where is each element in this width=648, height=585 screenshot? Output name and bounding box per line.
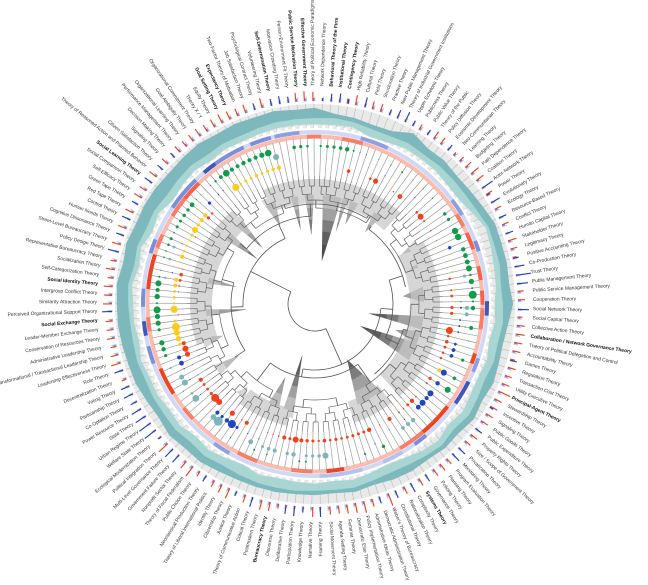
theory labels: left half: Theory of Reasoned Action and Planned Behavior [59,96,148,169]
theory labels: left half: Psychological Contract Theory [228,31,254,97]
theory labels: left half: Cognitive Dissonance Theory [49,206,111,233]
theory labels: right half: Co-Production Theory [529,252,577,266]
theory labels: left half: Representative Bureaucracy Theory [25,237,103,260]
theory labels: right half: Economic Development Theory [455,84,504,140]
theory labels: left half: Public Choice Theory [162,481,193,523]
theory labels: right half: Privatization Theory [467,456,503,491]
theory labels: right half: Governance Theory [431,485,460,525]
theory labels: left half: State Theory [108,421,135,442]
inner tree stems [222,204,407,382]
theory labels: right half: Theory of the Public [440,90,471,129]
theory labels: right half: Neo-Communitarian Theory [462,98,508,147]
theory labels: left half: Red Tape Theory [86,186,123,208]
theory labels: right half: Social Capital Theory [532,315,580,324]
theory labels: right half: Budgeting Theory [475,129,508,160]
theory labels: right half: Upper Echelons Theory [416,66,447,114]
theory labels: left half: Theory of Fiscal Federalism [144,476,185,527]
theory labels: right half: Contingency Theory [347,41,361,89]
theory labels: left half: Goal Setting Theory [193,67,220,111]
theory labels: left half: Socialization Theory [57,255,101,269]
theory labels: left half: Self-Determination Theory [253,31,272,92]
teal dots [164,153,469,459]
theory labels: right half: Signaling Theory [497,419,531,445]
green dots [153,145,477,463]
theory labels: right half: Public Value Theory [432,84,462,124]
theory labels: right half: Policy Diffusion Theory [447,91,483,135]
theory labels: right half: Stewardship Theory [506,403,548,429]
theory labels: left half: Decision Making Theory [126,107,167,149]
theory labels: left half: Voting Theory [87,389,117,407]
theory labels: right half: High Reliability Theory [356,41,372,91]
theory labels: right half: Public Goods Theory [491,427,533,459]
theory labels: left half: Policy Design Theory [59,233,106,251]
theory labels: left half: Social Identity Theory [47,277,98,287]
theory labels: left half: Job Satisfaction Theory [222,49,245,100]
theory labels: left half: Organizational Learning Theory [133,79,181,137]
theory labels: right half: Human Capital Theory [518,208,567,231]
theory labels: left half: Neoclassical Production Theory [159,486,201,548]
theory labels: left half: Power Resource Theory [82,413,130,446]
theory labels: left half: Theory of Liberal International Politics [163,491,209,565]
theory labels: right half: Structuration Theory [383,54,403,99]
theory labels: right half: Conflict Theory [515,204,548,222]
theory labels: right half: Coalition Theory [487,148,519,174]
theory labels: right half: Path Dependence Theory [481,127,528,167]
theory labels: right half: Policy Implementation Theory [364,515,385,580]
theory labels: left half: Discourse Theory [265,517,278,556]
theory labels: left half: Social Exchange Theory [41,318,98,328]
theory labels: right half: Cooperation Theory [533,296,577,303]
theory labels: right half: Publicness Theory [425,81,451,119]
theory labels: right half: Public Expenditure Theory [486,435,535,475]
theory labels: left half: Theory of Communicative Action [212,507,242,576]
theory labels: right half: Network Dependence Theory [319,22,328,86]
theory labels: left half: Bureaucracy Theory [252,515,269,563]
theory labels: right half: Regulation Theory [521,369,561,388]
theory labels: right half: Social Network Theory [533,306,583,313]
theory labels: left half: Similarity Attraction Theory [39,299,98,305]
theory labels: right half: Learning Theory [468,124,498,153]
theory labels: right half: Democratic Administration Theory [382,510,411,582]
theory labels: left half: Leadership Effectiveness Theory [37,363,107,389]
theory labels: left half: Identity Theory [197,495,217,527]
theory labels: left half: Equity Theory [191,86,212,116]
theory labels: left half: Intergroup Conflict Theory [41,288,98,296]
theory labels: right half: Collective Action Theory [531,324,585,336]
theory labels: left half: Leader-Member Exchange Theory [24,327,99,342]
theory labels: right half: Theory of Industrial Government Institutions [408,21,456,110]
theory labels: left half: Narrative Theory [308,521,314,558]
theory labels: right half: Social Movement Theory [328,521,337,576]
theory labels: left half: Conservation of Resources Theory [25,336,101,354]
gray outer ring [113,102,517,506]
theory labels: left half: Multi-Level Governance Theory [112,457,165,510]
theory labels: right half: Resource-Based Theory [511,186,562,214]
theory labels: left half: Control Theory [86,197,118,216]
theory labels: left half: Human Needs Theory [68,201,115,225]
theory labels: left half: Urban Regime Theory [98,429,140,462]
small base bars [95,84,535,524]
theory labels: right half: Games Theory [524,361,557,375]
theory labels: right half: Planning Theory [447,474,473,506]
theory labels: right half: Policing Theory [439,480,464,511]
theory labels: right half: Trust Theory [530,266,559,275]
theory labels: right half: Constitutional Theory [399,503,423,548]
theory labels: left half: Framing Theory [317,521,324,556]
theory labels: right half: Agenda-Setting Theory [337,520,348,571]
theory labels: left half: Justice Theory [216,503,234,535]
theory labels: left half: Partisanship Theory [79,397,121,422]
blue bars [102,94,531,517]
theory labels: left half: Nonprofit Sector Theory [141,469,179,514]
inner tree arcs [187,176,443,432]
theory labels: left half: Self-Categorization Theory [41,264,100,278]
theory labels: right half: Collaboration / Network Governance Theory [530,334,632,355]
theory labels: left half [0,10,324,576]
theory labels: left half: Citizen Satisfaction Theory [106,119,154,162]
theory labels: right half: Institutional Theory [338,42,349,88]
theory labels: right half: New Public Management Theory [400,38,434,106]
theory labels: left half: Citizenship Theory [202,500,225,539]
theory labels: left half: Postmodern Theory [242,513,260,556]
theory labels: right half: Administrative Ideas Theory [373,513,395,573]
theory labels: right half: Complexity Theory [416,495,440,534]
theory labels: right half: Ecology Theory [507,184,540,206]
theory labels: left half: Signaling Theory [129,125,160,155]
theory labels: right half: Public Management Theory [532,273,592,285]
theory labels: right half: Public Service Management Theory [532,283,611,294]
theory labels: right half: Principal-Agent Theory [510,395,562,424]
theory labels: left half: Expectancy Theory [204,63,228,107]
theory labels: left half: Person-Environment Fit Theory [275,20,290,89]
theory labels: left half: Organizational Commitment Theory [147,58,196,125]
theory labels: left half: Perceived Organizational Support Theory [7,309,98,318]
red bars [103,91,525,517]
lavender heat ring [73,62,557,546]
theory labels: right half: Feminist Theory [346,519,357,555]
yellow dots [170,165,457,446]
theory labels: left half: Two-Factor Theory of Motivation [204,36,236,103]
theory labels: right half: Behavioral Theory of the Firm [329,17,340,87]
theory labels: left half: Social Learning Theory [95,139,142,176]
theory labels: left half: Theory X / Y [184,94,204,121]
theory labels: left half: Motivation Crowding Theory [264,29,281,90]
theory labels: right half: Cultural Theory [365,59,379,93]
gray clade fills behind the tree [155,144,475,464]
theory labels: left half: Political Integration Theory [112,450,158,495]
theory labels: right half: Stakeholder Theory [521,221,564,240]
theory labels: right half: Size / Scope of Government Theory [474,449,536,506]
theory labels: right half: Positive Accounting Theory [527,238,586,257]
theory labels: right half: Monitoring Theory [461,462,492,495]
theory labels: left half: Ecological Modernization Theory [94,443,152,495]
theory labels: left half: Green Tape Theory [87,174,127,200]
theory labels: left half: Goal Ambiguity Theory [154,87,188,131]
theory labels: left half: Public Service Motivation Theory [286,10,299,87]
theory labels: right half: Weber's Theory of Bureaucracy [390,506,421,573]
theory labels: left half: Government Failure Theory [127,463,171,512]
theory labels: left half: Critical Theory [235,510,251,542]
theory labels: right half: Evolutionary Theory [502,170,543,197]
theory labels: right half: Power Theory [497,168,527,189]
blue dots [172,175,462,440]
theory labels: right half: Actor-Network Theory [492,149,535,182]
gray spikes [199,192,427,418]
theory labels: left half: Deliberative Theory [275,519,287,562]
light teal area band [128,117,504,492]
spoke lines and outer tree combs [157,146,473,462]
theory labels: left half: Street-Level Bureaucracy Theory [38,215,108,242]
salmon heat ring [78,67,552,541]
theory labels: left half: Role Theory [83,372,110,386]
theory labels: left half: Effective Government Theory [299,18,308,87]
theory labels: right half: Property Rights Theory [480,442,523,479]
theory labels: left half: Co-Optation Theory [85,405,125,432]
dark teal area band [116,107,513,496]
theory labels: right half: Utility Executive Theory [514,387,564,413]
theory labels: right half [310,0,632,582]
theory labels: right half: Theory of Political Economic Paradigms [310,0,316,86]
theory labels: left half: Volunteering Theory [246,50,263,94]
theory labels: right half: Transaction Cost Theory [518,378,570,403]
theory labels: left half: Self-Efficacy Theory [91,164,132,192]
theory labels: right half: Accountability Theory [526,352,574,369]
theory labels: left half: Social Comparison Theory [85,147,137,184]
theory labels: left half: Performance Management Theory [120,82,174,143]
theory labels: right half: Systems Theory [424,490,448,526]
theory labels: left half: Knowledge Theory [297,521,305,562]
theory labels: right half: Democratic Elite Theory [355,517,371,570]
theory labels: right half: Legitimacy Theory [524,232,565,248]
theory labels: left half: Administrative Leadership Theory [30,345,103,366]
theory labels: right half: Theory of Political Delegation and Control [528,343,618,366]
theory labels: right half: Practice Theory [391,67,410,102]
theory labels: right half: Incentive Theory [502,412,536,435]
theory labels: right half: Program Evaluation Theory [454,468,497,518]
theory labels: left half: Participation Theory [286,520,296,564]
theory labels: left half: Welfare State Theory [106,436,146,470]
theory labels: right half: Rationalization Theory [407,499,434,546]
theory labels: right half: Field Theory [374,68,387,96]
theory labels: left half: Decentralization Theory [63,380,114,405]
red dots [178,169,454,443]
